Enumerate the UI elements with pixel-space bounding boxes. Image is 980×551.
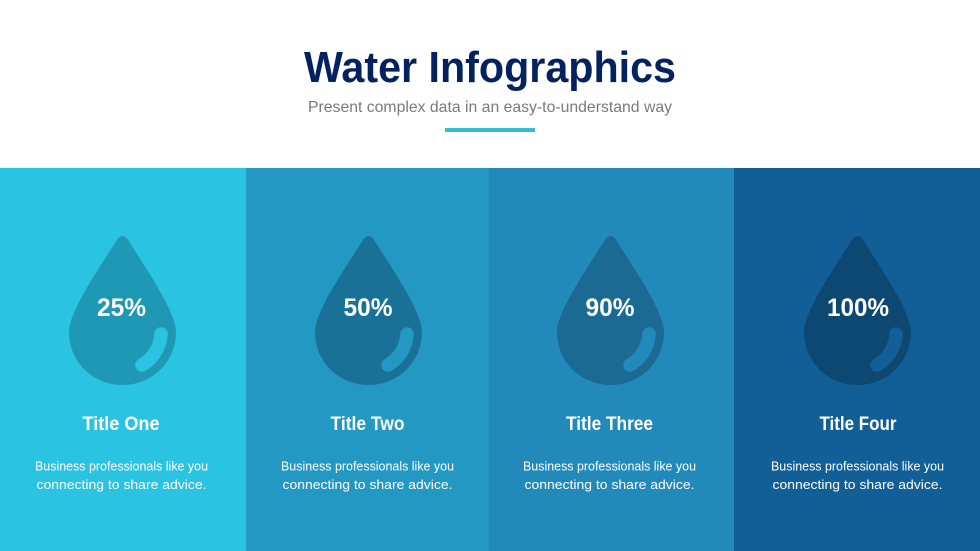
icon: water drop 50%: 50% xyxy=(344,294,392,322)
icon: water drop 100%: 100% xyxy=(827,294,889,322)
text block: title one: Business professionals like you xyxy=(35,458,208,474)
icon: water drop 25% xyxy=(69,236,176,385)
text block: title one: connecting to share advice. xyxy=(36,477,206,492)
text block: title four: Business professionals like you xyxy=(771,458,944,474)
text block: title two: connecting to share advice. xyxy=(282,477,452,492)
title: Water Infographics xyxy=(304,43,676,92)
text block: title three: Business professionals like you xyxy=(523,458,696,474)
text block: title three: connecting to share advice. xyxy=(524,477,694,492)
panel: title two xyxy=(246,168,489,551)
text block: title four: connecting to share advice. xyxy=(772,477,942,492)
heading: title two: Title Two xyxy=(330,414,404,435)
accent underline xyxy=(445,128,535,132)
heading: title three: Title Three xyxy=(566,414,653,435)
panel: title four xyxy=(734,168,980,551)
subtitle: Present complex data in an easy-to-understand way xyxy=(308,99,672,116)
icon: water drop 100% xyxy=(804,236,911,385)
heading: title one: Title One xyxy=(82,414,160,435)
icon: water drop 90%: 90% xyxy=(586,294,634,322)
icon: water drop 90% xyxy=(557,236,664,385)
icon: water drop 25%: 25% xyxy=(97,294,146,322)
icon: water drop 50% xyxy=(315,236,422,385)
panel: title three xyxy=(489,168,734,551)
heading: title four: Title Four xyxy=(820,414,897,435)
text block: title two: Business professionals like you xyxy=(281,458,454,474)
panel: title one xyxy=(0,168,246,551)
